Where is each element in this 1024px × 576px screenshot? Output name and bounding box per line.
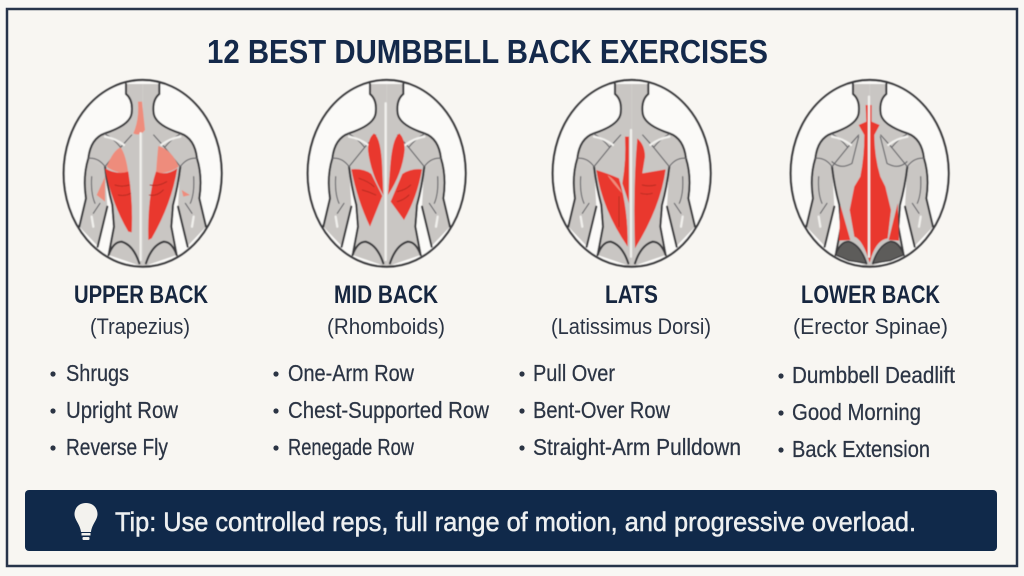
exercise list: lats: Straight-Arm Pulldown bbox=[533, 434, 741, 460]
exercise list: lats bbox=[519, 360, 741, 460]
panel: mid back bbox=[273, 80, 489, 460]
exercise list: mid back: One-Arm Row bbox=[288, 360, 414, 386]
muscle: latissimus dorsi: (Latissimus Dorsi) bbox=[551, 314, 711, 339]
panel: upper back bbox=[50, 80, 222, 460]
exercise list: lower back: Dumbbell Deadlift bbox=[792, 362, 956, 388]
tip banner bbox=[25, 490, 997, 551]
muscle: trapezius: (Trapezius) bbox=[90, 314, 190, 339]
panel: lats bbox=[519, 80, 741, 460]
exercise list: lats: Bent-Over Row bbox=[533, 397, 670, 423]
exercise list: lower back bbox=[778, 362, 956, 462]
exercise list: upper back: Shrugs bbox=[66, 360, 129, 386]
panel: lower back bbox=[778, 80, 956, 462]
tip text: Tip: Use controlled reps, full range of motion, and progressive overload. bbox=[115, 507, 916, 537]
illustration: lats muscles bbox=[553, 80, 711, 267]
illustration: mid back muscles bbox=[308, 80, 466, 267]
exercise list: mid back bbox=[273, 360, 489, 460]
heading: upper back: UPPER BACK bbox=[74, 281, 208, 309]
exercise list: mid back: Renegade Row bbox=[288, 434, 414, 460]
exercise list: upper back: Upright Row bbox=[66, 397, 178, 423]
exercise list: upper back bbox=[50, 360, 178, 460]
exercise list: mid back: Chest-Supported Row bbox=[288, 397, 489, 423]
exercise list: lats: Pull Over bbox=[533, 360, 615, 386]
heading: lower back: LOWER BACK bbox=[801, 281, 940, 309]
illustration: lower back muscles bbox=[791, 80, 949, 267]
muscle: erector spinae: (Erector Spinae) bbox=[793, 314, 948, 339]
exercise list: lower back: Good Morning bbox=[792, 399, 921, 425]
exercise list: lower back: Back Extension bbox=[792, 436, 930, 462]
exercise list: upper back: Reverse Fly bbox=[66, 434, 168, 460]
heading: mid back: MID BACK bbox=[334, 281, 438, 309]
title: 12 BEST DUMBBELL BACK EXERCISES bbox=[207, 33, 768, 70]
illustration: upper back muscles bbox=[64, 80, 222, 267]
icon: light bulb bbox=[74, 503, 98, 540]
muscle: rhomboids: (Rhomboids) bbox=[327, 314, 445, 339]
heading: lats: LATS bbox=[605, 281, 658, 309]
